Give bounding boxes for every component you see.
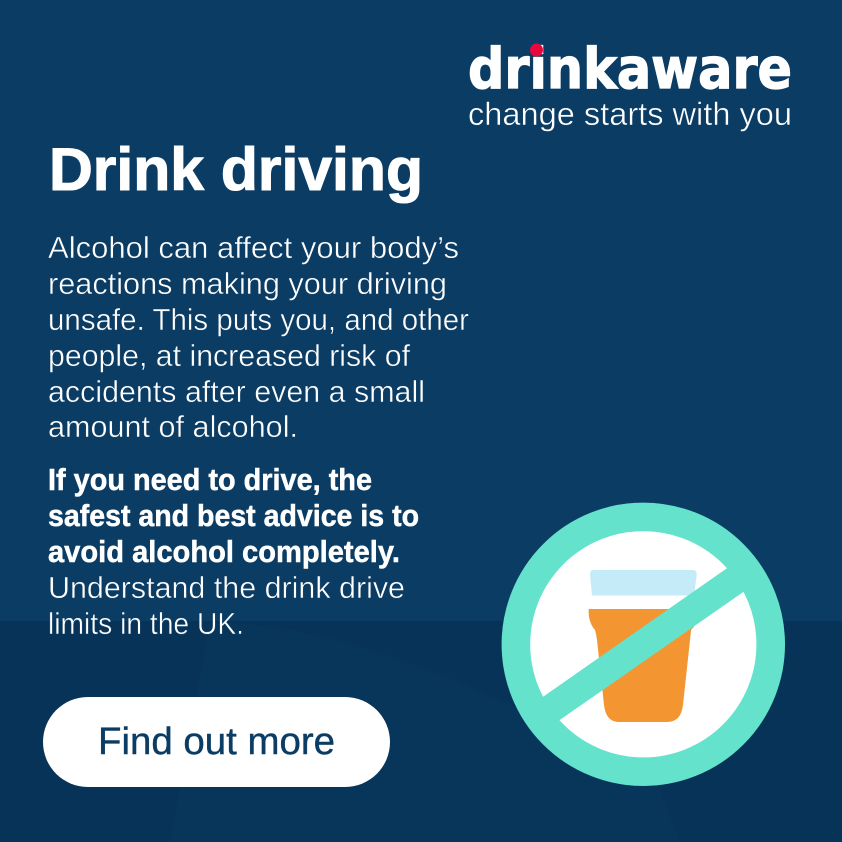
beer glass foam	[590, 570, 697, 596]
text block: intro paragraph: people, at increased risk of	[48, 339, 411, 373]
beer glass body	[589, 609, 698, 722]
logo tagline: change starts with you	[468, 96, 792, 132]
text block: advice: Understand the drink drive	[48, 571, 405, 605]
text block: advice: safest and best advice is to	[48, 499, 419, 533]
button: find out more	[43, 697, 390, 787]
logo: drinkaware	[468, 37, 792, 132]
sign inner disc	[523, 524, 763, 764]
text block: advice: limits in the UK.	[48, 607, 244, 641]
logo wordmark: drinkaware	[468, 37, 792, 102]
button: find out more: Find out more	[98, 721, 335, 763]
text block: advice: avoid alcohol completely.	[48, 535, 400, 569]
prohibition bar	[527, 557, 759, 731]
text block: advice: If you need to drive, the	[48, 463, 372, 497]
text block: intro paragraph: reactions making your driving	[48, 267, 447, 301]
title: Drink driving	[49, 136, 423, 203]
text block: intro paragraph: unsafe. This puts you, and other	[48, 303, 469, 337]
text block: intro paragraph: amount of alcohol.	[48, 410, 298, 444]
sign ring	[516, 517, 771, 772]
text block: advice	[48, 463, 419, 641]
icon: no alcohol sign	[516, 517, 771, 772]
logo red dot	[530, 44, 543, 56]
text block: intro paragraph: Alcohol can affect your body’s	[48, 231, 459, 265]
text block: intro paragraph: accidents after even a small	[48, 375, 425, 409]
text block: intro paragraph	[48, 231, 469, 444]
